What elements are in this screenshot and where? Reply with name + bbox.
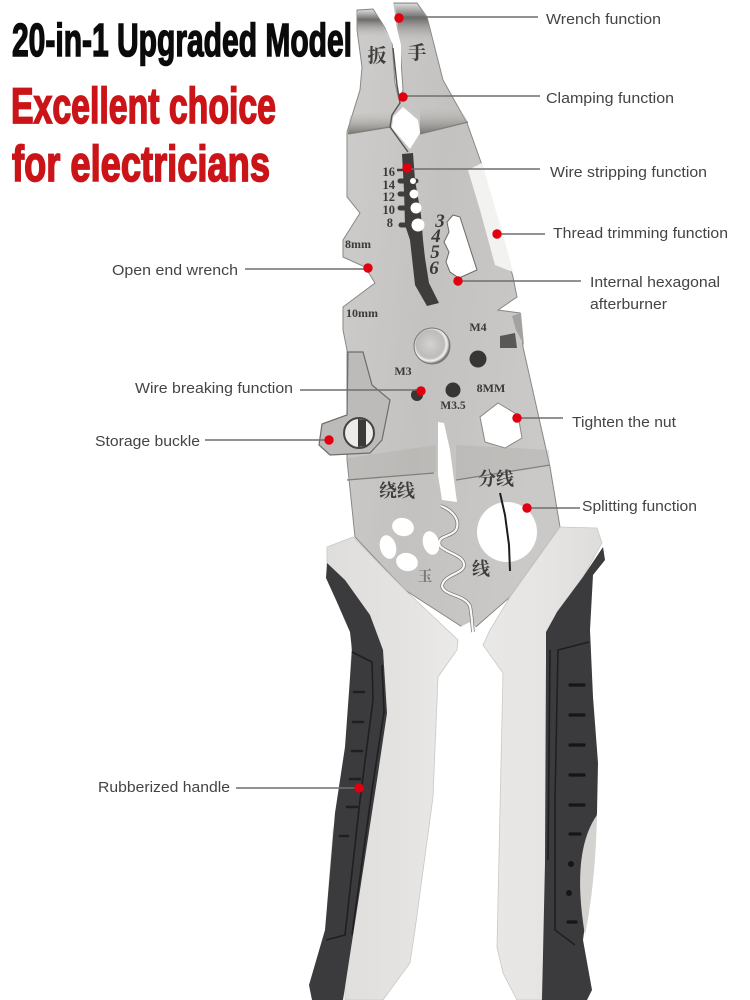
small holes bbox=[411, 350, 486, 401]
callout: rubberized handle: Rubberized handle bbox=[98, 780, 230, 796]
callout: clamping function: Clamping function bbox=[546, 91, 674, 107]
callout: storage buckle: Storage buckle bbox=[95, 434, 200, 450]
callout: internal hexagonal afterburner: afterburner bbox=[590, 297, 667, 313]
right handle bbox=[483, 527, 605, 1000]
tool engravings: 扳 bbox=[367, 45, 387, 67]
splitting hole bbox=[477, 502, 537, 562]
callout: tighten the nut: Tighten the nut bbox=[572, 415, 676, 431]
centre slit and crimp wave bbox=[438, 422, 490, 642]
callout: wire breaking function bbox=[135, 381, 426, 397]
callout: splitting function: Splitting function bbox=[582, 499, 697, 515]
tool engravings bbox=[345, 42, 514, 585]
callout: open end wrench: Open end wrench bbox=[112, 263, 238, 279]
wire stripping channel bbox=[397, 153, 439, 306]
callout: clamping function bbox=[398, 91, 674, 107]
jaw gap and diamond hole bbox=[373, 0, 420, 149]
thread trimming highlight bbox=[468, 163, 513, 272]
tool engravings: 6 bbox=[429, 258, 439, 279]
tool engravings: M3.5 bbox=[440, 400, 466, 412]
left handle bbox=[309, 537, 458, 1000]
tool engravings: 手 bbox=[407, 42, 427, 64]
thread slot bbox=[444, 215, 477, 278]
tool engravings: 16 bbox=[382, 165, 395, 179]
callout: rubberized handle bbox=[98, 780, 364, 796]
hex nut hole bbox=[480, 403, 522, 448]
callout: wrench function: Wrench function bbox=[546, 12, 661, 28]
callout: internal hexagonal afterburner: Internal hexagonal bbox=[590, 275, 720, 291]
pivot bolt bbox=[414, 328, 450, 364]
callout: internal hexagonal afterburner bbox=[453, 275, 720, 313]
subtitle: excellent choice for electricians: Excellent choice bbox=[11, 78, 276, 134]
tool engravings: 绕线 bbox=[379, 481, 415, 501]
callout: thread trimming function bbox=[492, 226, 728, 242]
tool engravings: 4 bbox=[430, 226, 441, 247]
tool engravings: 10mm bbox=[346, 306, 378, 320]
callout: open end wrench bbox=[112, 263, 373, 279]
subtitle: excellent choice for electricians bbox=[11, 78, 276, 192]
callout: thread trimming function: Thread trimming function bbox=[553, 226, 728, 242]
tool engravings: 玉 bbox=[417, 568, 433, 585]
callout: storage buckle bbox=[95, 434, 334, 450]
tool engravings: 8 bbox=[387, 216, 393, 230]
callout: splitting function bbox=[522, 499, 697, 515]
callout: tighten the nut bbox=[512, 413, 676, 431]
tool engravings: 14 bbox=[382, 178, 396, 192]
tool engravings: 8MM bbox=[477, 381, 505, 395]
callout: wire stripping function bbox=[402, 163, 707, 181]
tool engravings: 3 bbox=[434, 211, 445, 232]
storage buckle bbox=[319, 352, 390, 455]
steel head bbox=[343, 3, 560, 632]
pliers illustration bbox=[309, 0, 605, 1000]
callout: wrench function bbox=[394, 12, 661, 28]
tool engravings: 5 bbox=[430, 242, 440, 263]
subtitle: excellent choice for electricians: for electricians bbox=[12, 136, 270, 192]
tool engravings: 10 bbox=[382, 203, 395, 217]
title: 20-in-1 Upgraded Model bbox=[12, 14, 352, 66]
tool engravings: 8mm bbox=[345, 237, 371, 251]
tool engravings: M4 bbox=[469, 320, 487, 334]
tool engravings: 线 bbox=[472, 559, 490, 579]
tool engravings: M3 bbox=[394, 364, 412, 378]
tool engravings: 分线 bbox=[478, 468, 514, 489]
callout: wire stripping function: Wire stripping function bbox=[550, 165, 707, 181]
clover holes bbox=[377, 515, 442, 574]
callout: wire breaking function: Wire breaking function bbox=[135, 381, 293, 397]
lock notch bbox=[500, 313, 524, 348]
tool engravings: 12 bbox=[382, 190, 395, 204]
